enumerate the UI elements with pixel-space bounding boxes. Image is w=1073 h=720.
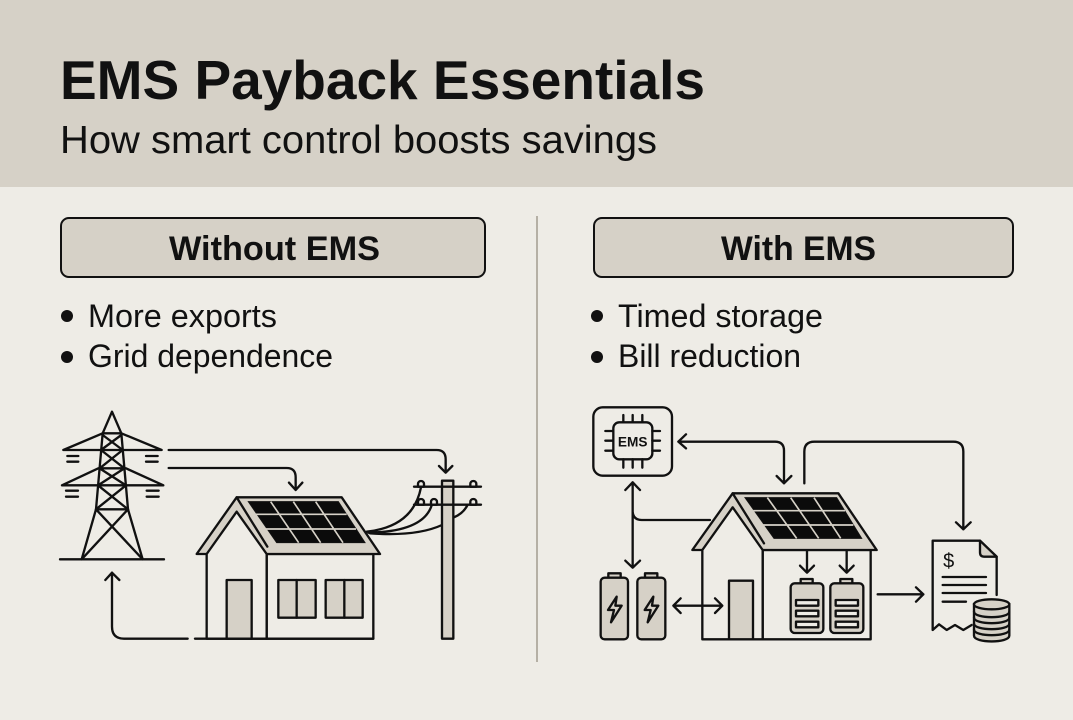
arrow: house back to tower (105, 573, 188, 639)
arrow: tower to roof (169, 468, 302, 490)
heading: without EMS: Without EMS (169, 230, 380, 268)
icon: bill and coins: $ (943, 550, 954, 572)
heading: without EMS (61, 218, 485, 277)
title: EMS Payback Essentials (60, 49, 705, 111)
bullet list: with EMS: Timed storage (618, 298, 823, 334)
panel: with EMS (591, 218, 1013, 641)
bullet list: without EMS (61, 298, 333, 374)
icon: house with solar panels (195, 497, 380, 639)
heading: with EMS (594, 218, 1013, 277)
icon: EMS chip: EMS (618, 435, 647, 450)
heading: with EMS: With EMS (721, 230, 876, 268)
arrow: tower to pole (169, 450, 452, 473)
icon: transmission tower (60, 412, 164, 559)
bullet list: without EMS: More exports (88, 298, 277, 334)
bullet list: with EMS (591, 298, 823, 374)
subtitle: How smart control boosts savings (60, 119, 657, 162)
bullet list: without EMS: Grid dependence (88, 338, 333, 374)
icon: EMS chip (593, 407, 672, 476)
icon: external batteries (601, 573, 665, 639)
diagram: house exporting to the grid (60, 412, 481, 639)
icon: indoor batteries (791, 579, 863, 633)
arrow: house to bill (878, 587, 923, 602)
arrows: roof to indoor batteries (800, 551, 854, 573)
icon: bill and coins (933, 541, 1009, 641)
panel: without EMS (60, 218, 485, 639)
arrow: EMS to solar roof (678, 434, 791, 483)
arrow: EMS to batteries (625, 482, 710, 568)
arrow: batteries to house (673, 598, 722, 613)
arrow: roof to bill (804, 442, 971, 529)
bullet list: with EMS: Bill reduction (618, 338, 801, 374)
header band (0, 0, 1073, 187)
icon: house with solar panels (692, 493, 877, 639)
icon: utility pole and wires (367, 481, 481, 639)
diagram: EMS managed home (593, 407, 1009, 641)
